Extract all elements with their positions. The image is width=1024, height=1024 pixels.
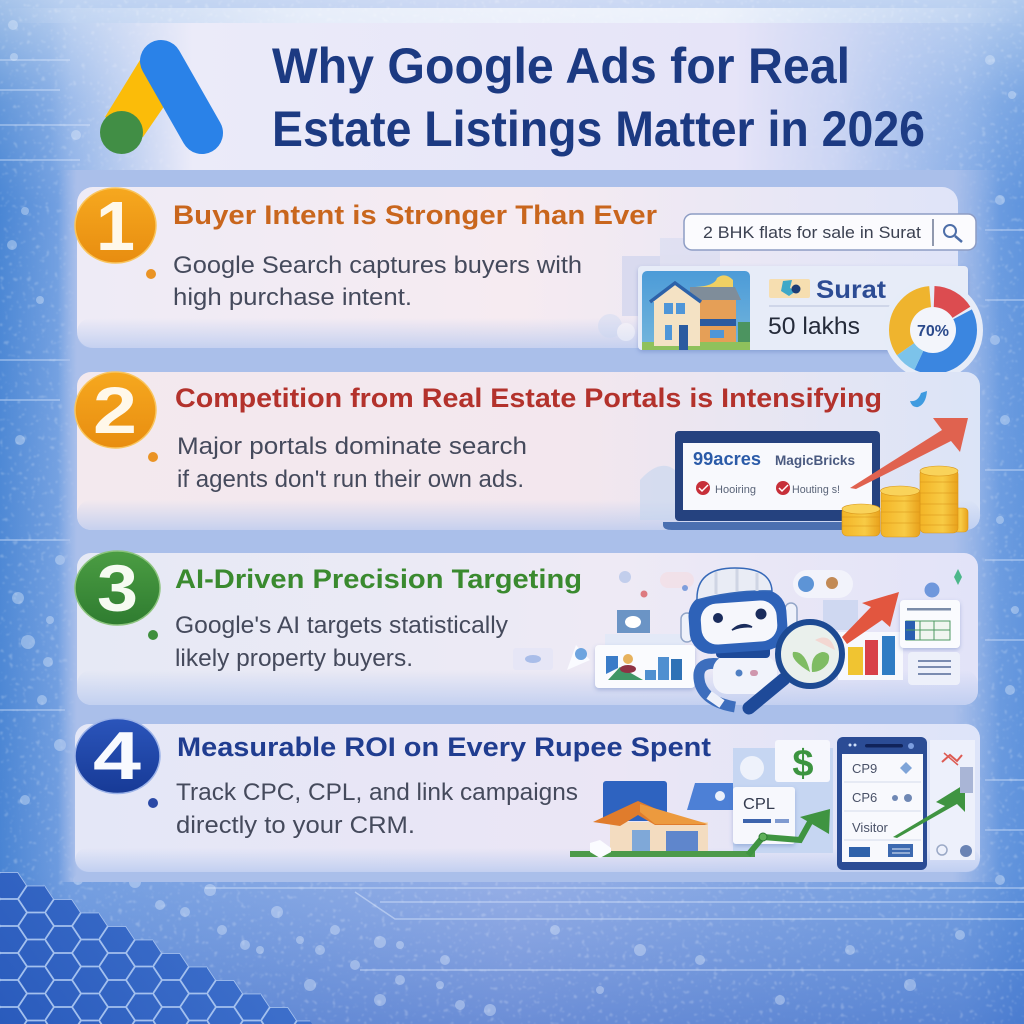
- icon: house: [642, 271, 750, 350]
- dollar card: $: [792, 743, 814, 785]
- body text 3: likely property buyers.: [175, 645, 413, 672]
- place name: Surat: [816, 276, 887, 304]
- phone: [837, 737, 927, 870]
- badge 3: [75, 551, 160, 625]
- laptop: [663, 431, 880, 530]
- icon: Google Ads logo: [100, 60, 202, 154]
- arrow: green growth: [748, 809, 830, 855]
- search bar: [684, 214, 976, 250]
- robot: [681, 568, 797, 707]
- header panel: [50, 23, 1000, 170]
- laptop: Houting s!: [792, 484, 840, 496]
- body text 4: directly to your CRM.: [176, 812, 415, 839]
- badge 4: 4: [93, 718, 141, 794]
- body text 2: if agents don't run their own ads.: [177, 466, 524, 493]
- panel: buyer intent: [75, 187, 983, 380]
- CPL card: [733, 787, 795, 844]
- top light band: [0, 8, 1024, 23]
- badge 3: 3: [97, 551, 138, 625]
- blue panels: [603, 781, 733, 821]
- bullet 2: [148, 452, 158, 462]
- arrow: growth: [850, 418, 968, 489]
- magnifying glass: [749, 622, 842, 708]
- heading 3: AI-Driven Precision Targeting: [175, 564, 582, 594]
- heading 1: Buyer Intent is Stronger Than Ever: [173, 200, 658, 230]
- title: [272, 38, 925, 157]
- badge 4: [75, 718, 160, 794]
- heading 4: Measurable ROI on Every Rupee Spent: [177, 732, 711, 762]
- search bar: 2 BHK flats for sale in Surat: [703, 224, 921, 242]
- title: Why Google Ads for Real: [272, 38, 850, 94]
- illustration: laptop and coins: [640, 391, 968, 537]
- badge 1: 1: [96, 187, 135, 265]
- status icons: [937, 753, 973, 857]
- donut chart 70%: [883, 280, 983, 380]
- body text 1: [173, 252, 582, 311]
- illustration: AI robot and charts: [513, 568, 962, 708]
- arrow: green phone: [893, 784, 965, 838]
- body text 3: [175, 612, 508, 672]
- panel: measurable ROI: [75, 718, 980, 872]
- laptop: MagicBricks: [775, 452, 855, 468]
- coin stacks: [842, 466, 968, 537]
- phone: Visitor: [852, 820, 889, 835]
- CPL card: CPL: [743, 796, 775, 813]
- phone: CP9: [852, 761, 877, 776]
- body text 4: Track CPC, CPL, and link campaigns: [176, 779, 578, 806]
- icon: bird: [910, 391, 927, 407]
- background chips: [513, 569, 962, 670]
- house: [570, 801, 755, 858]
- notes card: [908, 652, 960, 685]
- listing card: [638, 266, 968, 350]
- body text 3: Google's AI targets statistically: [175, 612, 508, 639]
- arrow: up: [842, 592, 899, 644]
- body text 2: [177, 433, 527, 493]
- badge 2: 2: [93, 373, 137, 447]
- body text 1: Google Search captures buyers with: [173, 252, 582, 279]
- illustration: search and listing: [598, 214, 983, 380]
- panel: AI targeting: [75, 551, 978, 708]
- body text 4: [176, 779, 578, 839]
- badge 1: [75, 187, 156, 265]
- panel: portals competition: [75, 372, 980, 537]
- heading 2: Competition from Real Estate Portals is Intensifying: [175, 383, 882, 413]
- dollar card: [775, 740, 830, 785]
- laptop: Hooiring: [715, 484, 756, 496]
- laptop: 99acres: [693, 448, 761, 469]
- phone: CP6: [852, 790, 877, 805]
- badge 2: [75, 372, 156, 448]
- body text 2: Major portals dominate search: [177, 433, 527, 460]
- left chart card: [595, 645, 695, 688]
- right bar chart: [838, 632, 903, 680]
- bullet 4: [148, 798, 158, 808]
- title: Estate Listings Matter in 2026: [272, 101, 925, 157]
- bullet 1: [146, 269, 156, 279]
- price: 50 lakhs: [768, 313, 860, 340]
- report card: [900, 600, 960, 648]
- illustration: ROI dashboard: [570, 737, 975, 870]
- body text 1: high purchase intent.: [173, 284, 412, 311]
- tag icon: [769, 279, 810, 298]
- bullet 3: [148, 630, 158, 640]
- donut chart 70%: 70%: [917, 323, 949, 340]
- stack backdrop: [58, 170, 1000, 882]
